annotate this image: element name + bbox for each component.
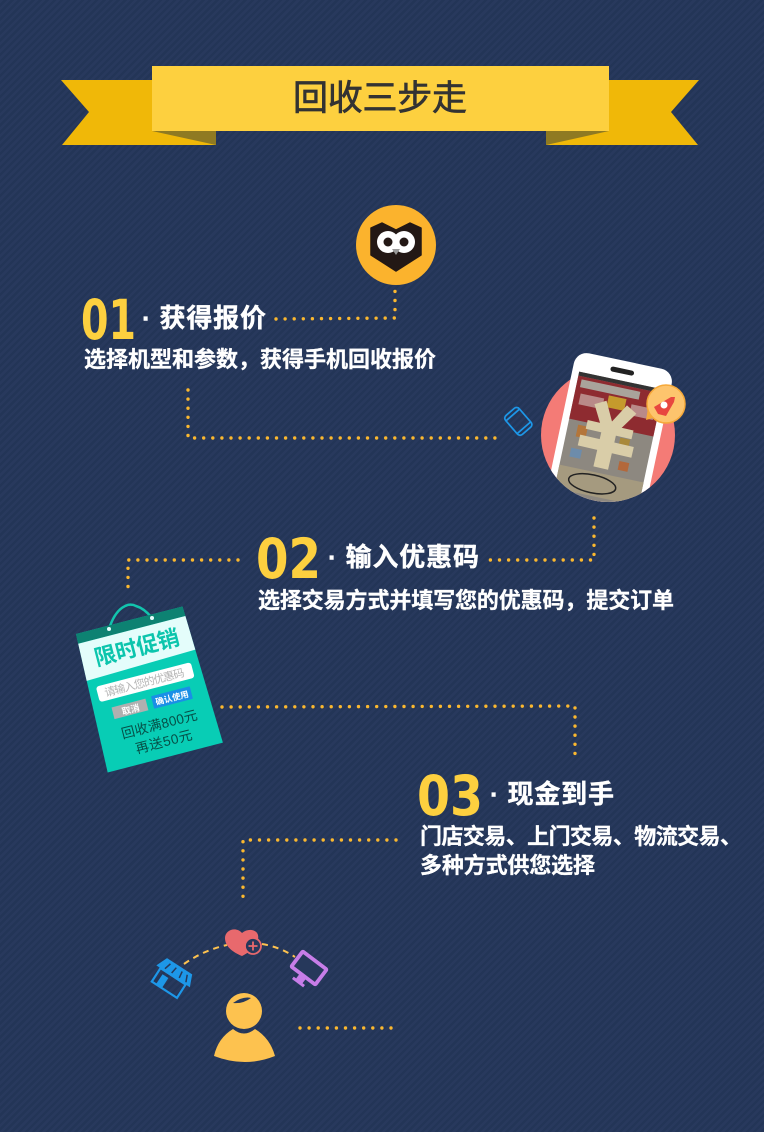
- step 2 text: [256, 527, 674, 613]
- coupon tag illustration: 请输入您的优惠码: [103, 665, 186, 699]
- step 3 description: 多种方式供您选择: [420, 853, 595, 878]
- connector: step 3 to person: [243, 840, 396, 905]
- coupon tag illustration: 确认使用: [154, 689, 190, 707]
- offer line 1: 回收满800元: [120, 707, 199, 742]
- cancel button: [112, 699, 148, 719]
- step 1 number: 01: [81, 288, 136, 352]
- connector: person to right: [300, 1026, 391, 1030]
- title: 回收三步走: [293, 79, 467, 118]
- step 2 number: 02: [256, 527, 321, 591]
- dashed arc: [184, 944, 295, 964]
- offer line 2: 再送50元: [134, 727, 194, 756]
- step 1 description: 选择机型和参数，获得手机回收报价: [84, 347, 436, 372]
- step 3 description: [420, 824, 742, 878]
- pink circle: [541, 368, 675, 502]
- ribbon left wing: [61, 80, 216, 145]
- icon: store: [148, 955, 196, 1001]
- icon: monitor: [286, 951, 327, 992]
- step 2 description: 选择交易方式并填写您的优惠码，提交订单: [258, 588, 674, 613]
- phone with screen: [551, 353, 672, 502]
- rocket speech bubble: [646, 385, 685, 423]
- coupon tag illustration: [72, 605, 223, 772]
- step 3 description: 门店交易、上门交易、物流交易、: [420, 824, 742, 849]
- coupon tag illustration: 取消: [120, 702, 141, 717]
- yuan sign: [574, 397, 643, 474]
- tag title band: [77, 616, 196, 681]
- tag top band: [76, 606, 185, 644]
- connector: owl to step 1: [276, 290, 395, 319]
- tag body: [72, 605, 223, 772]
- icon: heart with plus: [225, 929, 261, 956]
- coupon input: [96, 662, 195, 702]
- step 1 heading: · 获得报价: [142, 303, 266, 333]
- icon: owl logo: [356, 205, 436, 285]
- step 3 number: 03: [417, 764, 483, 828]
- ribbon left fold: [152, 131, 216, 145]
- ribbon right fold: [546, 131, 609, 145]
- connector: coupon to step 3: [222, 706, 575, 760]
- tag handle: [109, 605, 152, 629]
- connector: step 1 to phone: [188, 390, 497, 438]
- step 1 text: [81, 288, 436, 372]
- icon: small phone: [503, 406, 533, 437]
- ribbon centre: [152, 66, 609, 131]
- step 2 heading: · 输入优惠码: [328, 542, 479, 572]
- icon: person: [214, 993, 275, 1062]
- tag title: 限时促销: [92, 625, 182, 671]
- step 3 heading: · 现金到手: [490, 779, 614, 809]
- title ribbon: [61, 66, 699, 145]
- confirm button: [151, 686, 193, 709]
- connector: step 2 to coupon: [128, 560, 238, 588]
- phone illustration: [541, 353, 686, 502]
- ribbon right wing: [546, 80, 699, 145]
- connector: phone to step 2: [488, 518, 594, 560]
- step 3 text: [417, 764, 742, 878]
